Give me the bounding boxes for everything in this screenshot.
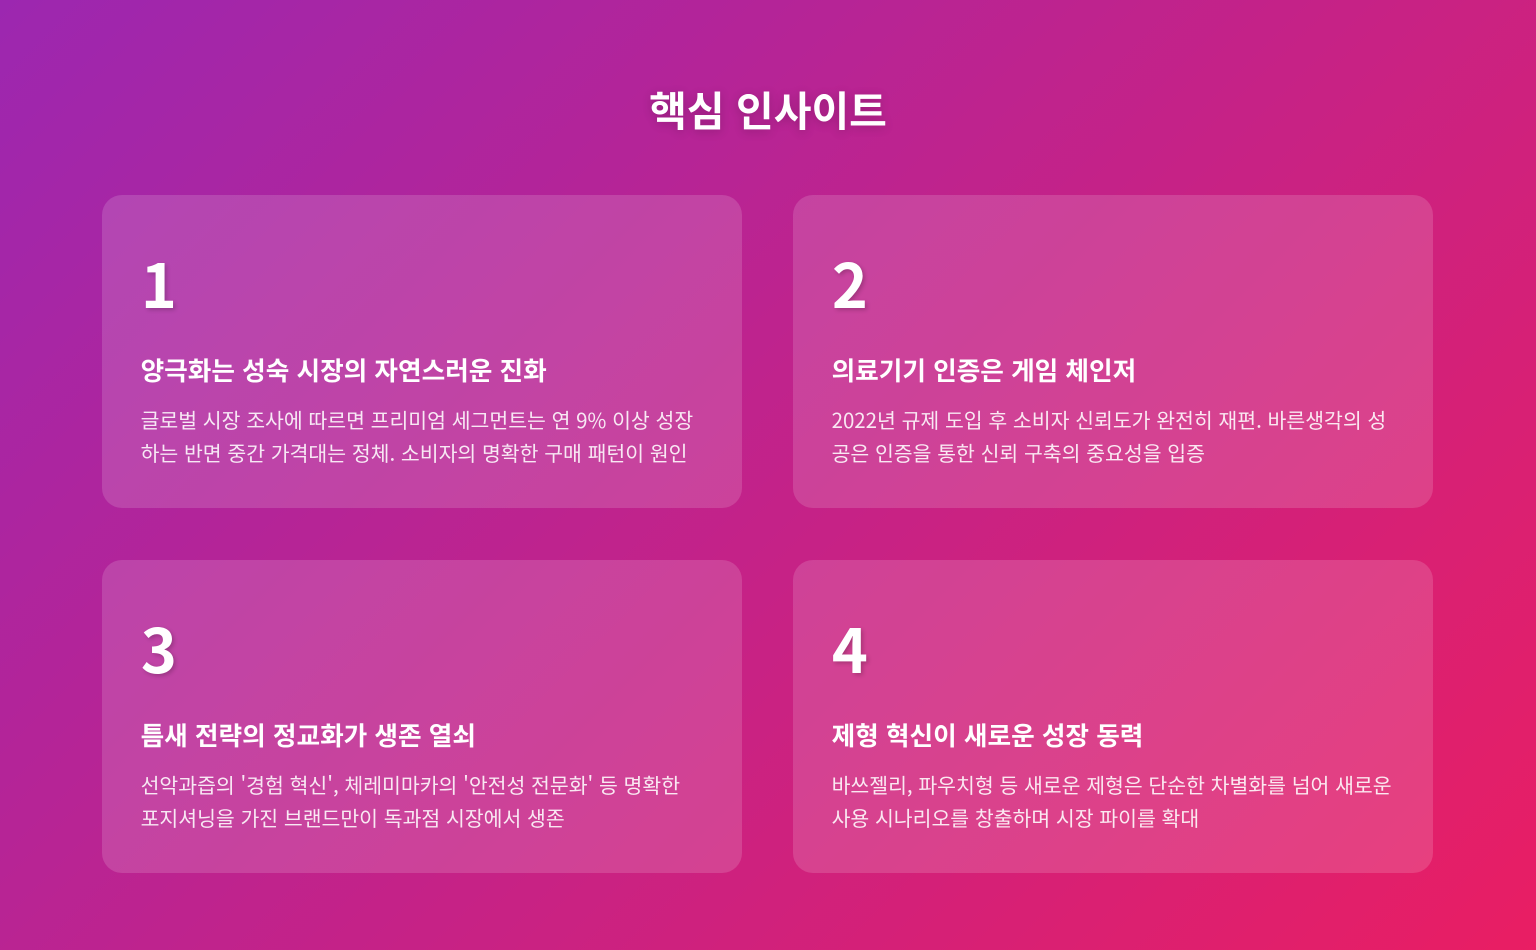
- body text 1: 글로벌 시장 조사에 따르면 프리미엄 세그먼트는 연 9% 이상 성장: [141, 404, 693, 434]
- heading 3: 틈새 전략의 정교화가 생존 열쇠: [141, 716, 476, 753]
- body text 1: [141, 404, 693, 467]
- number 3: 3: [141, 602, 177, 691]
- panel: insight 4: [793, 560, 1433, 873]
- body text 3: [141, 769, 680, 832]
- title: 핵심 인사이트: [649, 78, 887, 138]
- number 1: 1: [141, 237, 177, 326]
- body text 4: 바쓰젤리, 파우치형 등 새로운 제형은 단순한 차별화를 넘어 새로운: [832, 769, 1392, 799]
- body text 2: 공은 인증을 통한 신뢰 구축의 중요성을 입증: [832, 437, 1205, 467]
- panel: insight 1: [102, 195, 742, 508]
- panel: insight 2: [793, 195, 1433, 508]
- heading 2: 의료기기 인증은 게임 체인저: [832, 351, 1136, 388]
- body text 3: 선악과즙의 '경험 혁신', 체레미마카의 '안전성 전문화' 등 명확한: [141, 769, 680, 799]
- heading 4: 제형 혁신이 새로운 성장 동력: [832, 716, 1143, 753]
- number 2: 2: [832, 237, 868, 326]
- body text 4: 사용 시나리오를 창출하며 시장 파이를 확대: [832, 802, 1199, 832]
- heading 1: 양극화는 성숙 시장의 자연스러운 진화: [141, 351, 547, 388]
- body text 3: 포지셔닝을 가진 브랜드만이 독과점 시장에서 생존: [141, 802, 565, 832]
- panel: insight 3: [102, 560, 742, 873]
- body text 1: 하는 반면 중간 가격대는 정체. 소비자의 명확한 구매 패턴이 원인: [141, 437, 687, 467]
- body text 4: [832, 769, 1392, 832]
- body text 2: 2022년 규제 도입 후 소비자 신뢰도가 완전히 재편. 바른생각의 성: [832, 404, 1386, 434]
- body text 2: [832, 404, 1386, 467]
- number 4: 4: [832, 602, 868, 691]
